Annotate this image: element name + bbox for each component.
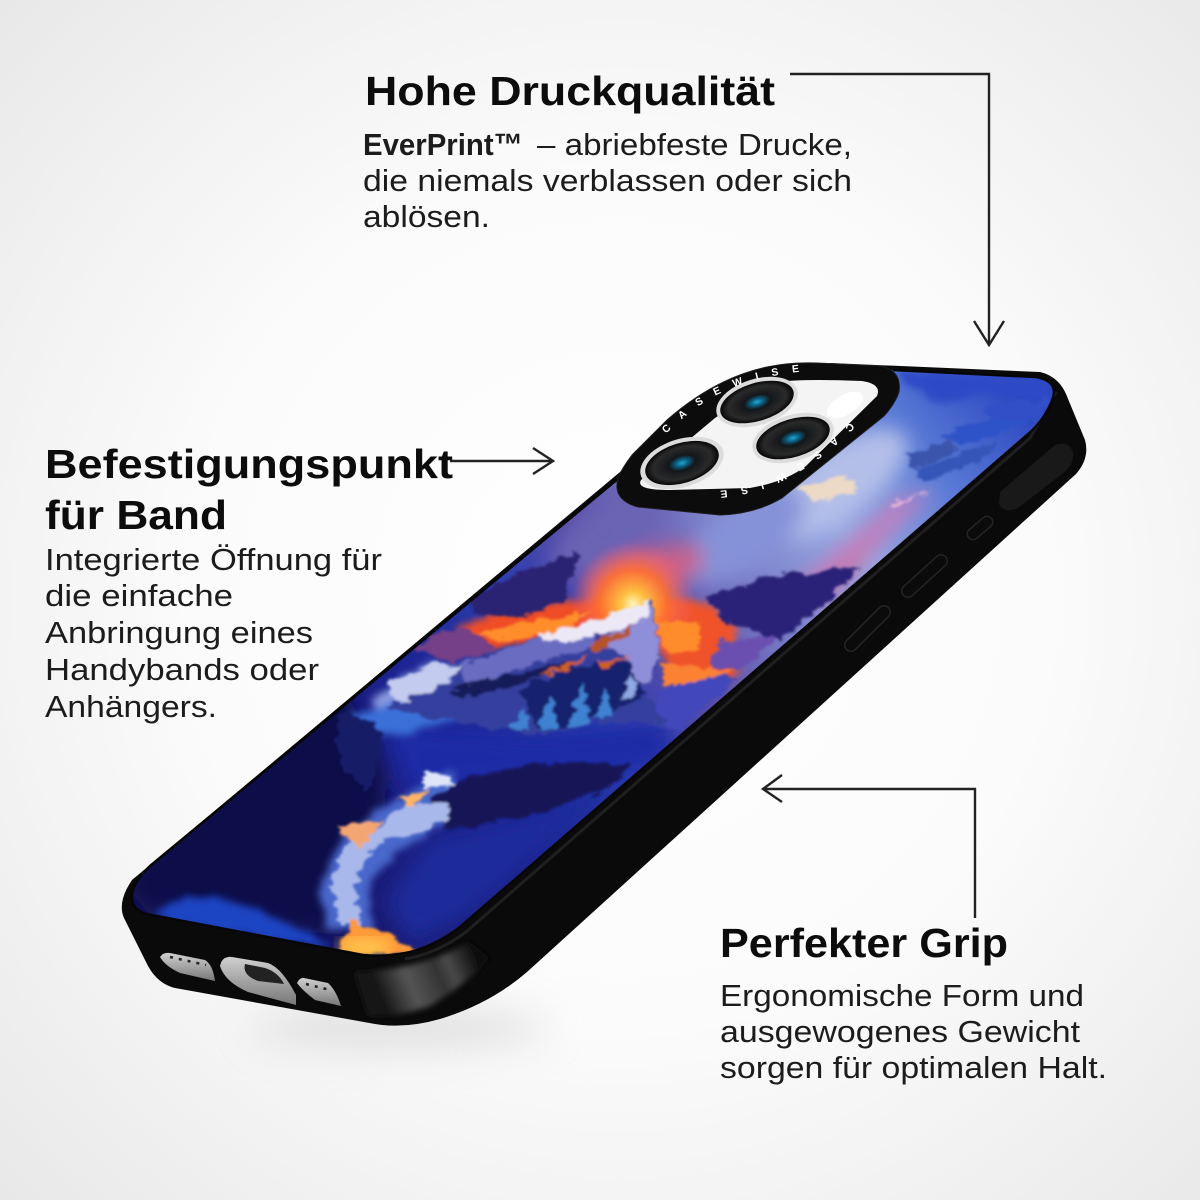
periwinkle sky <box>687 486 812 591</box>
deep blue plain <box>385 720 670 795</box>
river light blue <box>330 802 450 925</box>
camera glass area <box>640 380 878 490</box>
heading line 2: für Band <box>45 492 227 538</box>
body text <box>45 542 382 724</box>
navy ridge <box>425 763 630 830</box>
river orange upper <box>397 790 432 806</box>
case body <box>122 363 1086 1026</box>
pale sky centre <box>786 417 918 546</box>
left dark cloud <box>470 552 578 618</box>
rust ridge highlights <box>590 625 635 652</box>
speaker right <box>297 978 341 1006</box>
line 2: ausgewogenes Gewicht <box>720 1014 1080 1049</box>
arrow: strap point <box>450 448 553 474</box>
orange left base <box>455 596 630 648</box>
lower right blue <box>382 825 536 948</box>
camera bump <box>616 362 900 516</box>
speaker left holes <box>170 957 206 965</box>
speaker left <box>160 953 215 981</box>
lens top bezel <box>710 368 804 436</box>
lens left bezel <box>634 427 730 499</box>
line 3: sorgen für optimalen Halt. <box>720 1050 1107 1085</box>
body text <box>363 127 852 234</box>
camera ring <box>617 363 899 515</box>
right dark cloud <box>707 566 860 640</box>
artwork on back <box>133 370 1053 954</box>
line 4: Handybands oder <box>45 652 319 687</box>
artwork base <box>133 370 1053 954</box>
button upper <box>908 561 941 591</box>
heading: Perfekter Grip <box>720 920 1008 966</box>
sun glow <box>573 544 692 656</box>
mountain navy strokes <box>450 660 575 698</box>
button lower <box>851 612 884 645</box>
arrow: grip <box>763 775 975 918</box>
mountain pale streak <box>620 672 638 700</box>
corner gloss <box>354 942 490 1016</box>
river halo <box>320 770 460 930</box>
fine painted layer <box>330 398 1050 955</box>
orange right base <box>645 598 745 685</box>
speaker right holes <box>306 984 330 990</box>
lens right <box>746 404 840 472</box>
callout: Perfekter Grip <box>720 920 1107 1085</box>
lens right bezel <box>746 404 840 472</box>
cream cloud <box>800 475 860 503</box>
line 3: Anbringung eines <box>45 615 313 650</box>
line 1: – abriebfeste Drucke, <box>537 127 852 162</box>
hot orange left <box>478 612 590 642</box>
EverPrint: EverPrint™ <box>363 127 523 162</box>
ring lettering bottom: CASEWISE <box>720 424 854 498</box>
lens left glass <box>640 433 724 493</box>
pink highlight <box>890 490 935 508</box>
line 1: Integrierte Öffnung für <box>45 542 382 577</box>
callout: Hohe Druckqualität <box>363 68 852 234</box>
hot orange right <box>655 622 700 655</box>
top sky deep blue <box>895 372 1055 402</box>
violet under right cloud <box>708 635 778 668</box>
soft painted layer <box>150 372 1055 945</box>
river glow white <box>422 772 455 790</box>
purple sky left <box>544 508 661 584</box>
line 1: Ergonomische Form und <box>720 978 1084 1013</box>
snow cap <box>538 600 650 642</box>
dark tree cluster <box>335 712 384 790</box>
left mist <box>388 662 462 702</box>
blurred sky tones <box>120 408 935 945</box>
mountain navy face <box>520 660 645 732</box>
violet below peak <box>650 675 735 728</box>
line 3: ablösen. <box>363 199 490 234</box>
river orange lower <box>335 920 420 955</box>
body text <box>720 978 1107 1085</box>
lens left <box>634 427 730 499</box>
action button <box>973 522 987 534</box>
callout: Befestigungspunkt <box>45 441 453 724</box>
pink-violet low cloud <box>415 630 500 662</box>
line 2: die niemals verblassen oder sich <box>363 163 852 198</box>
case side highlight <box>405 392 1056 959</box>
lens right glass <box>751 409 835 467</box>
line 2: die einfache <box>45 578 233 613</box>
mist halo <box>370 660 475 720</box>
valley dark <box>120 680 385 935</box>
strap slot <box>999 444 1073 510</box>
heading: Hohe Druckqualität <box>365 68 775 114</box>
phone case <box>122 362 1086 1026</box>
arrow: print quality <box>790 74 1004 345</box>
usb opening <box>245 964 284 984</box>
rose band <box>800 545 880 605</box>
phone shadow <box>250 1008 550 1048</box>
river hot glow <box>339 938 391 956</box>
lens top <box>710 368 804 436</box>
ring lettering top: CASEWISE <box>662 364 799 432</box>
light blue band <box>345 695 490 740</box>
pink band <box>790 490 935 600</box>
mountain lavender face <box>600 606 660 685</box>
screen rim edge <box>132 370 1054 956</box>
side buttons <box>851 522 987 645</box>
bottom left blue <box>150 895 335 945</box>
mountain body <box>385 600 667 735</box>
salmon glow <box>574 530 714 601</box>
heading: Befestigungspunkt <box>45 441 453 487</box>
lens top glass <box>715 373 799 431</box>
mountain upper left lavender <box>460 625 600 688</box>
sky strokes <box>940 418 1015 446</box>
line 5: Anhängers. <box>45 689 217 724</box>
usb port <box>220 957 296 1005</box>
flash highlight <box>823 386 867 424</box>
orange low streak <box>660 662 738 684</box>
bottom ports <box>160 953 341 1006</box>
mountain blue streaks <box>512 680 612 730</box>
